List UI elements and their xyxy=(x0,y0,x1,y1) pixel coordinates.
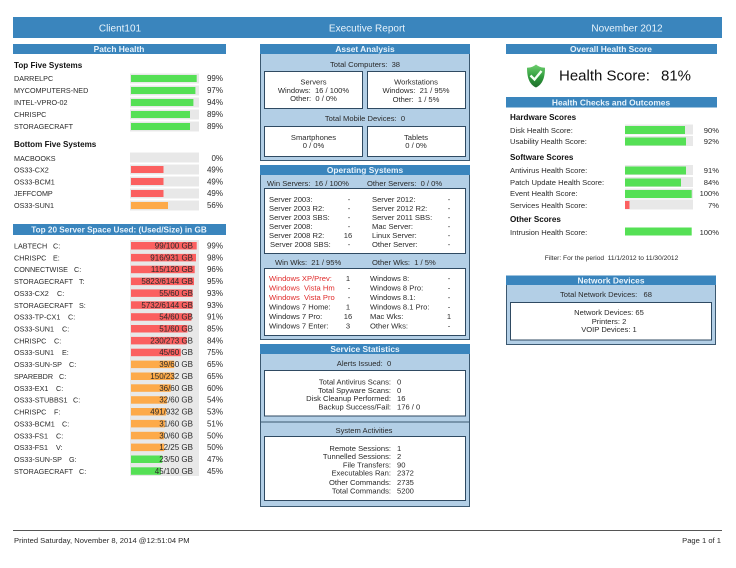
bar chart: server space rows: STORAGECRAFT xyxy=(14,277,74,286)
box: workstation operating systems: - xyxy=(448,302,451,312)
bar chart: server space rows: V: xyxy=(56,443,63,452)
top five systems: 89% xyxy=(207,122,223,131)
box: system activities: Executables Ran: xyxy=(331,469,391,478)
bar chart: server space rows: LABTECH xyxy=(14,242,47,250)
box: server operating systems: - xyxy=(448,213,451,222)
top five systems: Top Five Systems xyxy=(14,61,83,70)
box: system activities: Total Commands: xyxy=(332,487,391,496)
panel: operating systems xyxy=(260,165,470,340)
header banner: November 2012 xyxy=(591,24,663,34)
box: tablets xyxy=(368,126,466,156)
bottom five systems: 49% xyxy=(207,178,223,186)
bar chart: server space rows: OS33-SUN1 xyxy=(14,324,54,334)
box: tablets: Tablets xyxy=(404,133,428,142)
software scores: Services Health Score: xyxy=(510,201,587,210)
bar chart: server space rows: OS33-EX1 xyxy=(14,384,48,393)
bottom five systems xyxy=(14,140,223,210)
bar chart: server space rows: OS33-TP-CX1 xyxy=(14,313,60,322)
panel: top 20 server space used xyxy=(13,224,226,476)
box: server operating systems: Server 2012: xyxy=(372,195,415,204)
box: workstation operating systems: 3 xyxy=(346,322,350,330)
box: workstation operating systems: Mac Wks: xyxy=(370,312,403,321)
bottom five systems: Bottom Five Systems xyxy=(14,140,97,149)
heading: overall health score: Overall Health Score xyxy=(570,44,652,54)
box: workstations xyxy=(368,72,466,108)
bar chart: server space rows: 85% xyxy=(207,324,223,334)
heading: health checks xyxy=(506,97,717,108)
box: server operating systems: - xyxy=(448,195,451,204)
box: scans and backups: Total Antivirus Scans: xyxy=(319,378,391,387)
bar chart: server space rows: 99/100 GB xyxy=(155,242,193,250)
total mobile devices: Total Mobile Devices: 0 xyxy=(325,114,405,123)
box: workstation operating systems: Windows 8.1: xyxy=(370,293,416,302)
bar chart: server space rows: 65% xyxy=(207,372,223,381)
box: workstation operating systems: Windows 8 Pro: xyxy=(370,284,423,292)
box: system activities: 90 xyxy=(397,460,405,470)
bottom five systems: MACBOOKS xyxy=(14,154,56,163)
bar chart: server space rows: 51/60 GB xyxy=(159,324,193,334)
panel: network devices xyxy=(506,276,716,344)
box: workstation operating systems xyxy=(264,268,466,336)
total computers: Total Computers: 38 xyxy=(330,60,400,69)
box: server operating systems: Server 2008: xyxy=(269,222,312,231)
bar chart: server space rows: 23/50 GB xyxy=(159,455,193,464)
software scores: Patch Update Health Score: xyxy=(510,178,604,187)
heading: asset analysis: Asset Analysis xyxy=(335,44,395,54)
box: tablets: 0 / 0% xyxy=(405,141,427,150)
bar chart: server space rows: 91% xyxy=(207,313,223,322)
box: server operating systems xyxy=(264,188,466,254)
box: workstation operating systems: Windows Vista Pro xyxy=(269,293,335,302)
box: server operating systems: Server 2008 R2: xyxy=(269,231,324,240)
heading: operating systems xyxy=(260,165,470,175)
bar chart: server space rows: 75% xyxy=(207,348,223,357)
other scores: Other Scores xyxy=(510,215,561,224)
bar chart: server space rows: 45/60 GB xyxy=(159,348,193,357)
bar chart: server space rows: 32/60 GB xyxy=(159,396,193,405)
box: scans and backups: 0 xyxy=(397,386,401,395)
bar chart: server space rows: 5823/6144 GB xyxy=(141,277,193,286)
box: server operating systems: - xyxy=(348,240,351,249)
bar chart: server space rows: C: xyxy=(68,313,75,322)
box: workstation operating systems: - xyxy=(448,284,451,292)
bottom five systems: 0% xyxy=(211,154,223,163)
box: server operating systems: - xyxy=(448,231,451,240)
heading: operating systems: Operating Systems xyxy=(327,165,404,175)
box: workstation operating systems: Windows 8.1 Pro: xyxy=(370,302,430,312)
box: server operating systems: Server 2011 SBS: xyxy=(372,213,432,222)
box: workstation operating systems: Other Wks: xyxy=(370,322,408,330)
bar chart: server space rows: STORAGECRAFT xyxy=(14,301,74,310)
bar chart: server space rows: 54% xyxy=(207,396,223,405)
icon: green shield with check xyxy=(527,64,545,88)
bar chart: server space rows: 5732/6144 GB xyxy=(141,301,193,310)
box: system activities: Remote Sessions: xyxy=(329,444,391,453)
box: system activities: 2735 xyxy=(397,478,414,487)
box: server operating systems: Server 2003 SBS: xyxy=(269,213,330,222)
bar chart: server space rows: 99% xyxy=(207,242,223,250)
box: server operating systems: - xyxy=(448,222,451,231)
top five systems: INTEL-VPRO-02 xyxy=(14,98,68,107)
bar chart: server space rows: 12/25 GB xyxy=(159,443,193,452)
bar chart: server space rows: C: xyxy=(57,289,64,298)
box: workstation operating systems: - xyxy=(448,293,451,302)
box: workstation operating systems: - xyxy=(448,322,451,330)
software scores: Event Health Score: xyxy=(510,189,578,198)
software scores: 91% xyxy=(704,166,719,175)
heading: asset analysis xyxy=(260,44,470,54)
bar chart: server space rows: 50% xyxy=(207,431,223,440)
box: system activities: Other Commands: xyxy=(329,478,391,487)
software scores: Software Scores xyxy=(510,153,574,162)
top five systems: 97% xyxy=(207,86,223,95)
box: network device counts: VOIP Devices: 1 xyxy=(581,325,637,334)
box: system activities: 2 xyxy=(397,452,401,461)
top five systems: DARRELPC xyxy=(14,74,53,83)
box: workstations: Workstations xyxy=(394,78,438,86)
box: workstation operating systems: Windows 7 Home: xyxy=(269,302,331,312)
heading: patch health xyxy=(13,44,226,54)
bar chart: server space rows: C: xyxy=(59,372,66,381)
bar chart: server space rows: C: xyxy=(79,467,86,476)
bar chart: server space rows: CHRISPC xyxy=(14,408,46,416)
box: server operating systems: Mac Server: xyxy=(372,222,413,231)
bar chart: server space rows: C: xyxy=(56,384,63,393)
box: workstation operating systems: - xyxy=(448,274,451,283)
alerts issued: Alerts Issued: 0 xyxy=(337,359,391,368)
top five systems: 89% xyxy=(207,110,223,119)
top five systems: CHRISPC xyxy=(14,110,46,119)
heading: network devices: Network Devices xyxy=(577,276,645,286)
other scores: 100% xyxy=(700,228,719,237)
total network devices: Total Network Devices: 68 xyxy=(560,290,652,299)
box: server operating systems: Server 2008 SBS: xyxy=(270,240,331,249)
hardware scores xyxy=(510,113,719,146)
box: network device counts: Network Devices: 65 xyxy=(574,308,644,317)
bar chart: server space rows: 50% xyxy=(207,443,223,452)
bottom five systems: OS33-CX2 xyxy=(14,166,49,174)
box: system activities: 5200 xyxy=(397,487,414,496)
bar chart: server space rows: 115/120 GB xyxy=(151,265,193,274)
panel: overall health score xyxy=(506,44,717,88)
box: workstation operating systems: 1 xyxy=(447,312,451,321)
bar chart: server space rows: 60% xyxy=(207,384,223,393)
software scores xyxy=(510,153,719,210)
bar chart: server space rows: G: xyxy=(69,455,77,464)
bar chart: server space rows: 31/60 GB xyxy=(159,419,193,428)
bottom five systems: 56% xyxy=(207,201,223,210)
box: workstation operating systems: Windows 7 Enter: xyxy=(269,322,329,330)
box: system activities: File Transfers: xyxy=(343,460,391,470)
bar chart: server space rows xyxy=(14,240,223,476)
panel: asset analysis xyxy=(260,44,470,160)
box: workstations: Windows: 21 / 95% xyxy=(382,86,450,95)
heading: network devices xyxy=(506,276,716,286)
box: workstation operating systems: 16 xyxy=(344,312,352,321)
box: smartphones xyxy=(264,126,362,156)
panel: health checks and outcomes xyxy=(506,97,719,237)
hardware scores: 92% xyxy=(704,137,719,146)
bar chart: server space rows: E: xyxy=(53,253,60,262)
bar chart: server space rows: STORAGECRAFT xyxy=(14,467,74,476)
bar chart: server space rows: CHRISPC xyxy=(14,336,46,345)
box: workstation operating systems: Windows 7 Pro: xyxy=(269,312,322,321)
box: scans and backups: Backup Success/Fail: xyxy=(318,403,391,412)
bar chart: server space rows: C: xyxy=(54,336,61,345)
box: system activities: 1 xyxy=(397,444,401,453)
bar chart: server space rows: 65% xyxy=(207,360,223,369)
bar chart: server space rows: OS33-FS1 xyxy=(14,443,48,452)
box: system activities xyxy=(264,436,466,500)
bar chart: server space rows: 45/100 GB xyxy=(155,467,193,476)
box: scans and backups: Total Spyware Scans: xyxy=(318,386,391,395)
box: server operating systems: - xyxy=(348,195,351,204)
bar chart: server space rows: 55/60 GB xyxy=(159,289,193,298)
box: server operating systems: Server 2012 R2: xyxy=(372,204,427,213)
health score value xyxy=(559,68,691,84)
box: server operating systems: 16 xyxy=(344,231,352,240)
box: servers: Other: 0 / 0% xyxy=(290,94,337,103)
box: workstations: Other: 1 / 5% xyxy=(393,95,440,104)
bar chart: server space rows: 96% xyxy=(207,265,223,274)
box: workstation operating systems: Windows 8: xyxy=(370,274,409,283)
bottom five systems: 49% xyxy=(207,166,223,174)
bar chart: server space rows: 39/60 GB xyxy=(159,360,193,369)
box: server operating systems: - xyxy=(448,204,451,213)
software scores: 100% xyxy=(700,189,719,198)
bar chart: server space rows: OS33-BCM1 xyxy=(14,419,55,428)
box: servers: Servers xyxy=(300,78,327,86)
bar chart: server space rows: OS33-SUN1 xyxy=(14,348,54,357)
box: system activities: 2372 xyxy=(397,469,414,478)
box: server operating systems: - xyxy=(348,204,351,213)
box: server operating systems: Linux Server: xyxy=(372,231,417,240)
footer: Printed Saturday, November 8, 2014 @12:51:04 PM xyxy=(14,536,190,545)
bar chart: server space rows: 230/273 GB xyxy=(150,336,193,345)
bar chart: server space rows: 93% xyxy=(207,301,223,310)
panel: service statistics xyxy=(260,344,470,506)
box: smartphones: Smartphones xyxy=(291,133,336,142)
box: workstation operating systems: 1 xyxy=(346,302,350,312)
box: scans and backups: 16 xyxy=(397,394,405,403)
header banner: Client101 xyxy=(99,24,142,34)
box: server operating systems: - xyxy=(448,240,451,249)
bar chart: server space rows: 916/931 GB xyxy=(150,253,193,262)
header banner xyxy=(13,17,722,38)
software scores: 7% xyxy=(708,201,719,210)
health score value: 81% xyxy=(661,68,691,84)
bar chart: server space rows: 53% xyxy=(207,408,223,416)
top five systems xyxy=(14,61,223,132)
top five systems: 94% xyxy=(207,98,223,107)
bar chart: server space rows: SPAREBDR xyxy=(14,372,53,381)
box: server operating systems: - xyxy=(348,213,351,222)
bar chart: server space rows: 93% xyxy=(207,289,223,298)
bar chart: server space rows: 54/60 GB xyxy=(159,313,193,322)
bar chart: server space rows: 36/60 GB xyxy=(159,384,193,393)
bar chart: server space rows: CONNECTWISE xyxy=(14,265,68,274)
bottom five systems: OS33-BCM1 xyxy=(14,178,55,186)
top five systems: STORAGECRAFT xyxy=(14,122,74,131)
box: servers xyxy=(264,72,362,108)
bar chart: server space rows: C: xyxy=(62,324,69,334)
box: servers: Windows: 16 / 100% xyxy=(278,86,349,95)
box: system activities: Tunnelled Sessions: xyxy=(323,452,391,461)
top five systems: MYCOMPUTERS-NED xyxy=(14,86,88,95)
workstation summary: Win Wks: 21 / 95% xyxy=(275,258,342,267)
bar chart: server space rows: C: xyxy=(73,396,80,405)
footer xyxy=(13,530,722,545)
panel: patch health xyxy=(13,44,226,210)
heading: top 20 server space: Top 20 Server Space Used: (Used/Size) in GB xyxy=(31,226,207,234)
bar chart: server space rows: OS33-FS1 xyxy=(14,431,48,440)
box: workstation operating systems: Windows Vista Hm xyxy=(269,284,335,292)
bar chart: server space rows: 45% xyxy=(207,467,223,476)
box: server operating systems: - xyxy=(348,222,351,231)
bar chart: server space rows: C: xyxy=(74,265,81,274)
bar chart: server space rows: E: xyxy=(62,348,69,357)
bottom five systems: 49% xyxy=(207,189,223,198)
bar chart: server space rows: C: xyxy=(53,242,60,250)
header banner: Executive Report xyxy=(329,24,405,34)
box: network device counts xyxy=(510,302,712,340)
bar chart: server space rows: 30/60 GB xyxy=(159,431,193,440)
box: scans and backups: 0 xyxy=(397,378,401,387)
bar chart: server space rows: 98% xyxy=(207,253,223,262)
bar chart: server space rows: C: xyxy=(56,431,63,440)
hardware scores: Disk Health Score: xyxy=(510,126,573,135)
bar chart: server space rows: F: xyxy=(54,408,60,416)
bar chart: server space rows: 150/232 GB xyxy=(150,372,193,381)
footer: Page 1 of 1 xyxy=(682,536,721,545)
top five systems: 99% xyxy=(207,74,223,83)
bar chart: server space rows: C: xyxy=(62,419,69,428)
server summary: Other Servers: 0 / 0% xyxy=(367,179,442,188)
heading: service statistics: Service Statistics xyxy=(330,344,400,354)
box: smartphones: 0 / 0% xyxy=(303,141,325,150)
bar chart: server space rows: OS33-SUN-SP xyxy=(14,455,62,464)
bar chart: server space rows: 84% xyxy=(207,336,223,345)
filter period note: Filter: For the period 11/1/2012 to 11/30/2012 xyxy=(545,255,679,262)
bar chart: server space rows: 47% xyxy=(207,455,223,464)
bar chart: server space rows: 95% xyxy=(207,277,223,286)
bar chart: server space rows: S: xyxy=(79,301,86,310)
heading: top 20 server space xyxy=(13,224,226,235)
box: workstation operating systems: Windows XP/Prev: xyxy=(269,274,332,283)
heading: patch health: Patch Health xyxy=(94,44,144,54)
other scores: Intrusion Health Score: xyxy=(510,228,587,237)
server summary: Win Servers: 16 / 100% xyxy=(267,179,349,188)
bar chart: server space rows: OS33-STUBBS1 xyxy=(14,396,68,405)
box: workstation operating systems: - xyxy=(348,284,351,292)
box: scans and backups: 176 / 0 xyxy=(397,403,420,412)
software scores: 84% xyxy=(704,178,719,187)
box: server operating systems: Other Server: xyxy=(372,240,418,249)
hardware scores: Hardware Scores xyxy=(510,113,577,122)
hardware scores: 90% xyxy=(704,126,719,135)
bar chart: server space rows: 51% xyxy=(207,419,223,428)
box: workstation operating systems: 1 xyxy=(346,274,350,283)
heading: service statistics xyxy=(260,344,470,354)
server summary xyxy=(267,179,442,188)
system activities label: System Activities xyxy=(336,426,393,435)
bar chart: server space rows: OS33-SUN-SP xyxy=(14,360,62,369)
health score value: Health Score: xyxy=(559,68,650,84)
box: server operating systems: Server 2003 R2: xyxy=(269,204,324,213)
heading: overall health score xyxy=(506,44,717,54)
box: scans and backups: Disk Cleanup Performed: xyxy=(306,394,391,403)
hardware scores: Usability Health Score: xyxy=(510,137,587,146)
box: server operating systems: Server 2003: xyxy=(269,195,312,204)
box: network device counts: Printers: 2 xyxy=(592,317,626,326)
heading: health checks: Health Checks and Outcomes xyxy=(552,98,670,108)
box: workstation operating systems: - xyxy=(348,293,351,302)
workstation summary: Other Wks: 1 / 5% xyxy=(372,258,436,267)
bar chart: server space rows: C: xyxy=(69,360,76,369)
bottom five systems: OS33-SUN1 xyxy=(14,201,54,210)
box: scans and backups xyxy=(264,370,466,416)
bar chart: server space rows: CHRISPC xyxy=(14,253,46,262)
bottom five systems: JEFFCOMP xyxy=(14,189,53,198)
bar chart: server space rows: 491/932 GB xyxy=(150,408,193,416)
workstation summary xyxy=(275,258,436,267)
bar chart: server space rows: T: xyxy=(79,277,85,286)
bar chart: server space rows: OS33-CX2 xyxy=(14,289,49,298)
other scores xyxy=(510,215,719,237)
software scores: Antivirus Health Score: xyxy=(510,166,587,175)
